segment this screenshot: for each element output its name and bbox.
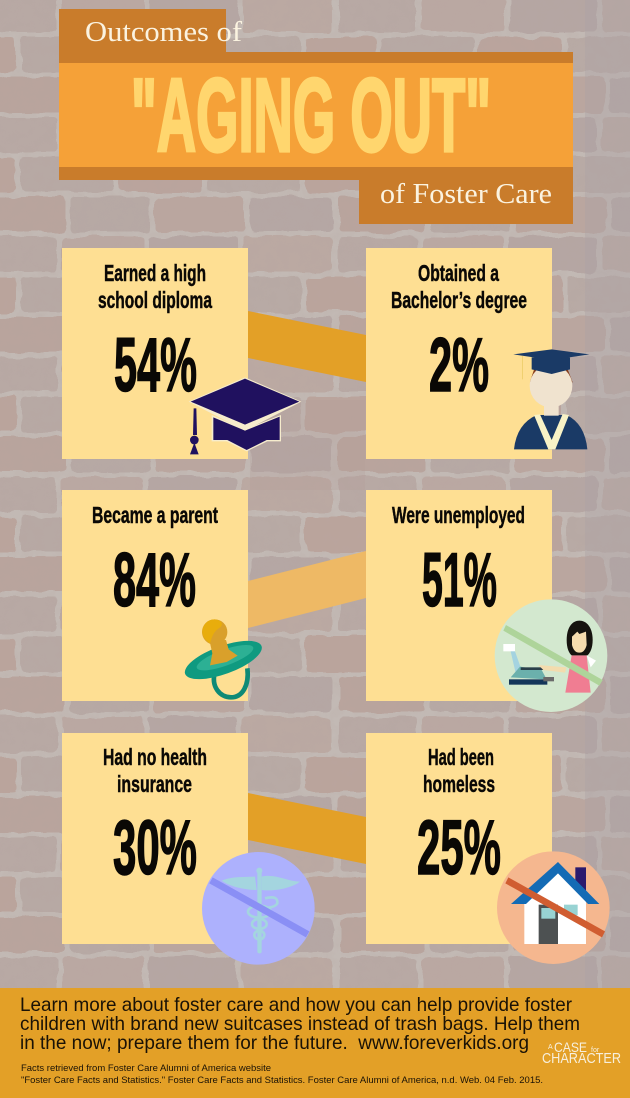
citation text [21,1063,543,1086]
banner orange band [59,63,573,167]
heading: of foster care: of Foster Care [380,179,552,210]
call to action text: in the now; prepare them for the future. www.foreverkids.org [20,1032,529,1054]
icon: pacifier [180,619,266,697]
logo: a case for character: for [591,1047,600,1054]
stat: 84% [113,538,196,623]
panel: unemployed: 51% [422,538,497,623]
icon: medical caduceus crossed out [202,852,315,965]
label: Became a parent [92,502,218,528]
citation text: "Foster Care Facts and Statistics." Foster Care Facts and Statistics. Foster Care Alumni of America, n.d. Web. 04 Feb. 2015. [21,1075,543,1086]
stat: 30% [113,805,197,891]
panel: unemployed [366,490,552,701]
citation text: Facts retrieved from Foster Care Alumni of America website [21,1063,271,1074]
icon: house crossed out [497,851,610,964]
banner bottom tab [359,167,573,224]
panel: bachelor's degree: Bachelor’s degree [391,287,527,313]
label: Obtained a [418,260,499,286]
panel: no health insurance [62,733,248,944]
icon: graduation cap [189,377,301,454]
label: Had no health [103,744,207,770]
logo: a case for character: CASE [554,1039,587,1055]
call to action text: Learn more about foster care and how you can help provide foster [20,994,572,1016]
logo: a case for character [542,1039,621,1067]
panel: no health insurance: insurance [117,771,192,797]
footer panel [0,988,630,1098]
call to action text: children with brand new suitcases instead of trash bags. Help them [20,1013,580,1035]
stat: 25% [417,805,501,891]
label: Had been [428,744,494,770]
banner dark band [59,52,573,180]
connector: insurance to homeless [248,793,366,864]
icon: cashier crossed out [495,599,607,712]
connector: high school to bachelor [248,311,366,382]
logo: a case for character: A [548,1044,553,1051]
stat: 54% [114,323,197,408]
connector: parent to unemployed [248,551,366,628]
call to action text [20,994,580,1054]
panel: high school diploma: school diploma [98,287,212,313]
icon: graduate [513,349,589,449]
heading: outcomes of: Outcomes of [85,17,243,48]
header banner [59,9,573,224]
banner top tab [59,9,226,63]
panel: bachelor's degree [366,248,552,459]
panel: high school diploma [62,248,248,459]
label: Were unemployed [392,502,525,528]
label: Earned a high [104,260,206,286]
panel: homeless [366,733,552,944]
stat: 2% [429,323,489,408]
panel: homeless: homeless [423,771,495,797]
panel: became a parent [62,490,248,701]
